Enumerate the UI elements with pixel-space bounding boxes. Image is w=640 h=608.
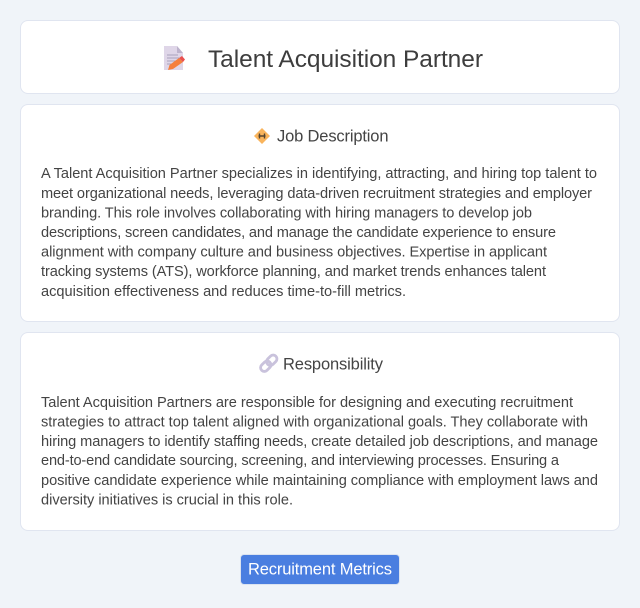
- text block: job description: alignment with company culture and business objectives. Expertise in applicant: [41, 244, 547, 260]
- panel: title card: [20, 20, 620, 94]
- text block: job description: acquisition effectiveness and reduces time-to-fill metrics.: [41, 284, 406, 300]
- title: Talent Acquisition Partner: [208, 46, 483, 73]
- icon: document with pencil: [164, 46, 185, 70]
- text block: responsibility: diversity initiatives is crucial in this role.: [41, 492, 293, 508]
- heading: job description: Job Description: [277, 128, 388, 146]
- text block: responsibility: positive candidate experience while maintaining compliance with employment laws and: [41, 473, 598, 489]
- text block: job description: tracking systems (ATS), workforce planning, and market trends enhances talent: [41, 264, 546, 280]
- text block: job description: descriptions, screen candidates, and manage the candidate experience to ensure: [41, 225, 556, 241]
- text block: responsibility: Talent Acquisition Partners are responsible for designing and executing recruitment: [41, 395, 573, 411]
- button: recruitment metrics: Recruitment Metrics: [248, 560, 392, 578]
- text block: responsibility: end-to-end candidate sourcing, screening, and interviewing processes. Ensuring a: [41, 453, 560, 469]
- heading: responsibility: Responsibility: [283, 356, 384, 374]
- text block: responsibility: hiring managers to identify staffing needs, create detailed job descriptions, and manage: [41, 434, 598, 450]
- panel: job description: [20, 104, 620, 322]
- text block: job description: [41, 166, 597, 300]
- button: recruitment metrics: [240, 554, 400, 585]
- text block: job description: A Talent Acquisition Partner specializes in identifying, attracting, and hiring top talent to: [41, 166, 597, 182]
- text block: job description: meet organizational needs, leveraging data-driven recruitment strategies and employer: [41, 186, 592, 202]
- text block: responsibility: [41, 395, 598, 508]
- panel: responsibility: [20, 332, 620, 531]
- icon: chain link: [259, 354, 278, 373]
- text block: job description: branding. This role involves collaborating with hiring managers to develop job: [41, 206, 532, 222]
- text block: responsibility: strategies to attract top talent aligned with organizational goals. They collaborate with: [41, 414, 588, 430]
- icon: road sign diamond: [254, 128, 270, 144]
